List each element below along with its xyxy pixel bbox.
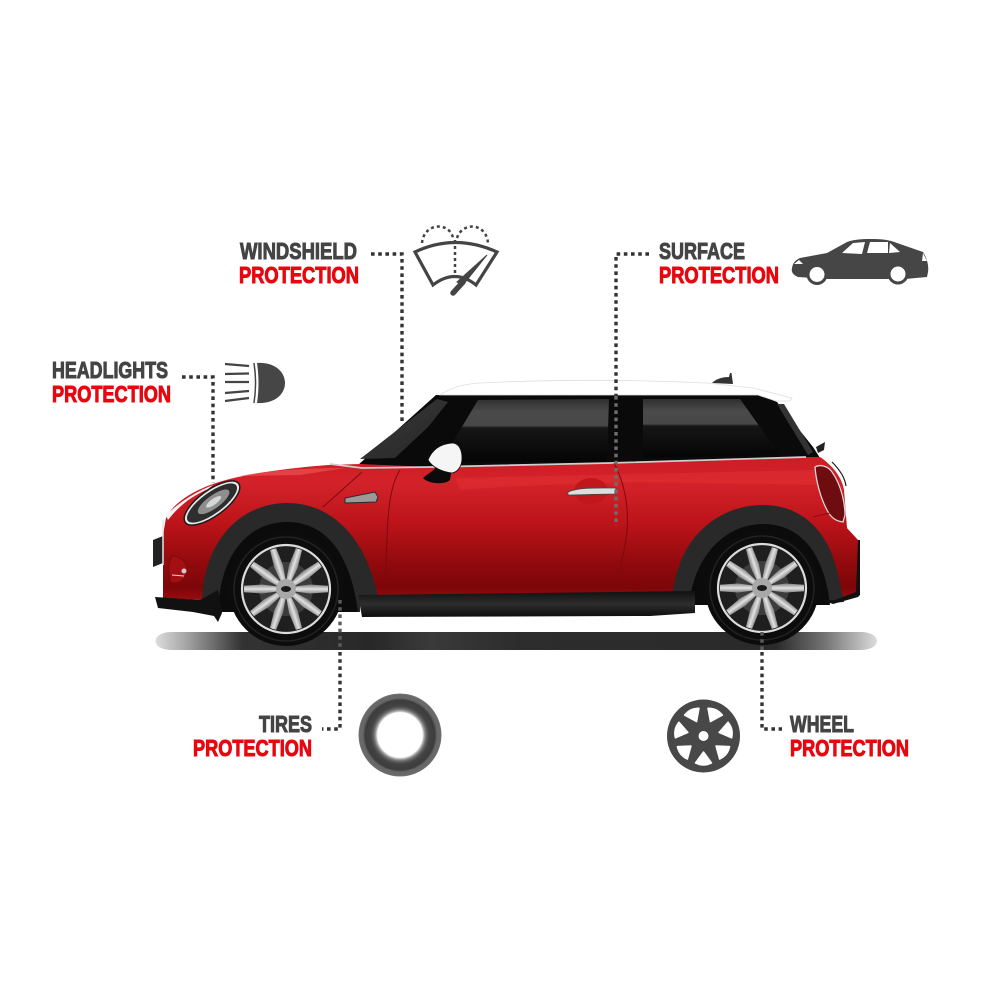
windshield — [360, 399, 448, 459]
body shine band — [455, 470, 830, 490]
label: windshield: WINDSHIELD — [240, 238, 357, 264]
white roof — [440, 380, 792, 401]
side window front — [441, 399, 609, 462]
red body — [163, 457, 860, 602]
callout: windshield protection — [239, 227, 497, 422]
callout: wheel protection — [667, 632, 909, 772]
car: red Mini side view — [153, 373, 860, 646]
dotted leader — [616, 254, 649, 396]
door outline — [386, 463, 627, 594]
rear wheel — [705, 531, 819, 645]
rear quarter glass — [777, 404, 813, 455]
dotted leader — [182, 377, 213, 483]
front bumper — [155, 590, 222, 622]
label: protection: PROTECTION — [790, 735, 909, 761]
chrome beltline — [330, 457, 806, 468]
callout: headlights protection — [52, 357, 285, 483]
rear arch inner — [689, 524, 830, 605]
front arch inner — [218, 522, 358, 612]
dotted leader over wheel — [338, 600, 342, 650]
label: protection: PROTECTION — [193, 735, 312, 761]
hood white reflection — [166, 485, 213, 520]
dotted leader — [371, 254, 402, 422]
door handle recess — [574, 478, 608, 504]
front arch — [202, 503, 378, 612]
rear fender crease — [813, 513, 830, 517]
front grille — [153, 536, 163, 567]
front wheel — [229, 532, 343, 646]
icon: windshield wiper — [415, 227, 497, 293]
dotted leader over car — [614, 396, 618, 526]
label: protection: PROTECTION — [239, 262, 359, 288]
label: headlights: HEADLIGHTS — [52, 357, 168, 383]
front fog light — [169, 556, 187, 583]
icon: wheel — [667, 700, 740, 772]
antenna — [712, 373, 733, 384]
callout: surface protection — [616, 238, 928, 526]
side badge — [345, 492, 378, 503]
side sill — [358, 591, 695, 617]
rear bumper — [822, 540, 860, 604]
label: tires: TIRES — [259, 711, 312, 737]
icon: car — [792, 239, 928, 285]
label: wheel: WHEEL — [790, 711, 854, 737]
dotted leader — [322, 652, 340, 729]
rear spoiler fin — [816, 442, 825, 453]
mirror — [423, 443, 462, 483]
dotted leader — [762, 652, 782, 729]
label: protection: PROTECTION — [52, 381, 171, 407]
black greenhouse — [358, 395, 820, 470]
fender crease — [323, 472, 362, 507]
rear arch — [673, 505, 844, 604]
hood highlight — [240, 468, 345, 476]
tail light — [815, 466, 845, 522]
ground shadow — [156, 632, 877, 650]
door handle — [568, 488, 616, 495]
side window rear — [643, 399, 780, 458]
grille chrome edge — [162, 520, 164, 565]
headlight — [178, 473, 246, 533]
label: protection: PROTECTION — [659, 262, 779, 288]
icon: tire — [358, 694, 442, 776]
label: surface: SURFACE — [659, 238, 745, 264]
tail light outer edge — [832, 462, 846, 486]
dotted leader over wheel — [760, 632, 764, 650]
callout: tires protection — [193, 600, 442, 776]
icon: headlight — [225, 363, 285, 403]
